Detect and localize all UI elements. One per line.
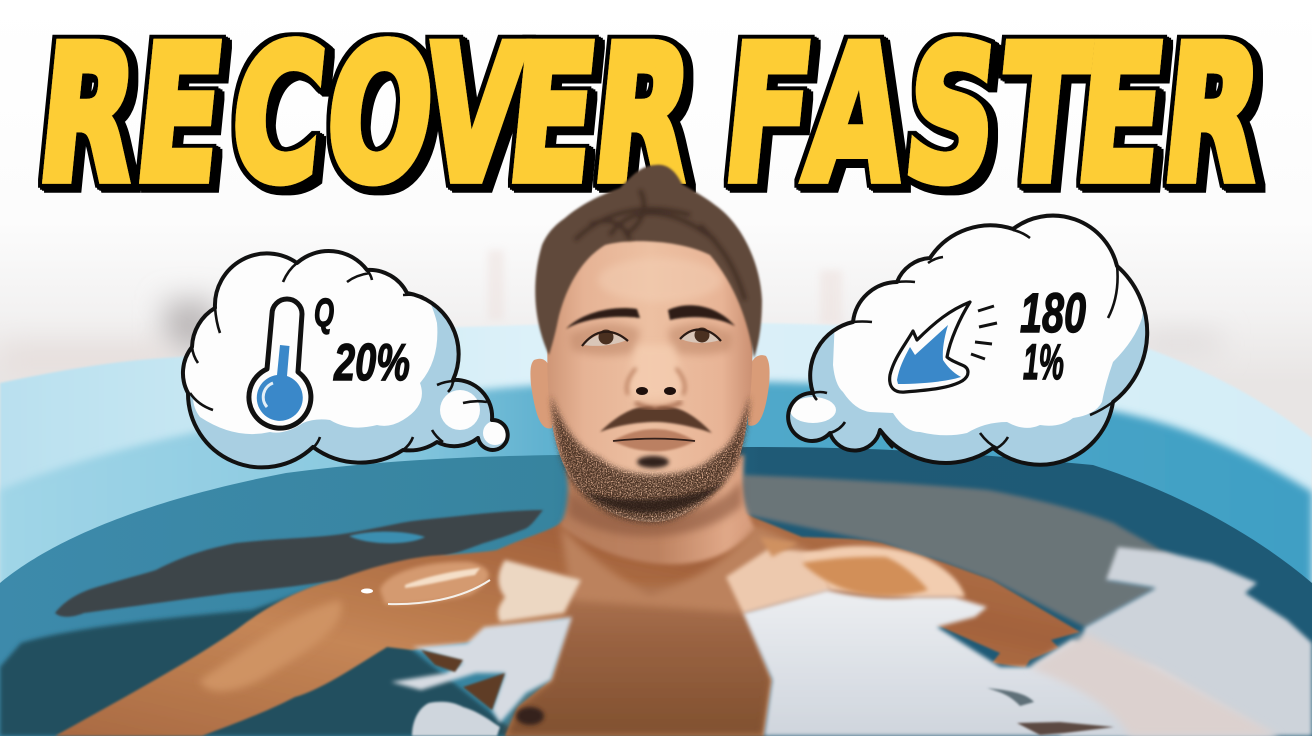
chest (505, 585, 772, 736)
jaw shadow (585, 478, 728, 513)
cloud shape (788, 200, 1160, 465)
eyebrows (566, 308, 640, 329)
label: 20%: 20% (333, 334, 410, 392)
under-chin shadow (568, 480, 742, 536)
right shoulder highlight (802, 546, 965, 597)
hair (535, 165, 762, 358)
label: Q: Q (314, 291, 334, 335)
left shoulder (380, 562, 489, 605)
eye socket shadows (570, 324, 640, 356)
torso and arms (55, 513, 1080, 736)
grey reflection, right (743, 475, 1177, 627)
moustache (600, 406, 712, 433)
beard stubble (551, 395, 750, 523)
icon: speed gauge needle (890, 302, 997, 392)
soul patch (637, 456, 669, 468)
upper chest (560, 525, 830, 613)
forehead highlight (598, 258, 722, 302)
right shoulder hollow (802, 557, 928, 596)
lighter water inlet (349, 532, 425, 543)
pale right forearm (1030, 633, 1279, 736)
label: 1%: 1% (1023, 334, 1064, 390)
nipple shadow (516, 707, 544, 725)
icon: thermometer (249, 299, 311, 428)
neck (560, 455, 756, 564)
thought bubble: speed (788, 200, 1160, 465)
left chest cream patch (498, 560, 581, 622)
dark brown under arm (421, 650, 463, 672)
nose (629, 345, 683, 399)
pale water, right (1060, 547, 1312, 736)
ears (530, 359, 552, 429)
tub inner wall (0, 382, 1312, 736)
title: RECOVER FASTER (30, 7, 1271, 224)
water (0, 447, 1312, 736)
face (547, 232, 752, 522)
dark reflection, left (55, 510, 543, 617)
foam bottom left (412, 702, 500, 736)
lower dark water, left (0, 580, 520, 736)
cold plunge tub rim (0, 323, 1312, 736)
lips (613, 429, 695, 452)
left arm highlight (200, 600, 342, 691)
foam under left shoulder (391, 617, 572, 723)
label: 180: 180 (1020, 281, 1086, 344)
cloud shape (170, 240, 508, 467)
water surface highlights (391, 590, 1279, 736)
foam centre right (743, 590, 1279, 736)
dark streaks on foam (987, 688, 1034, 706)
eyes (584, 334, 627, 346)
man (55, 165, 1080, 736)
right chest highlight (726, 548, 830, 613)
thought bubble: temperature (170, 240, 508, 467)
